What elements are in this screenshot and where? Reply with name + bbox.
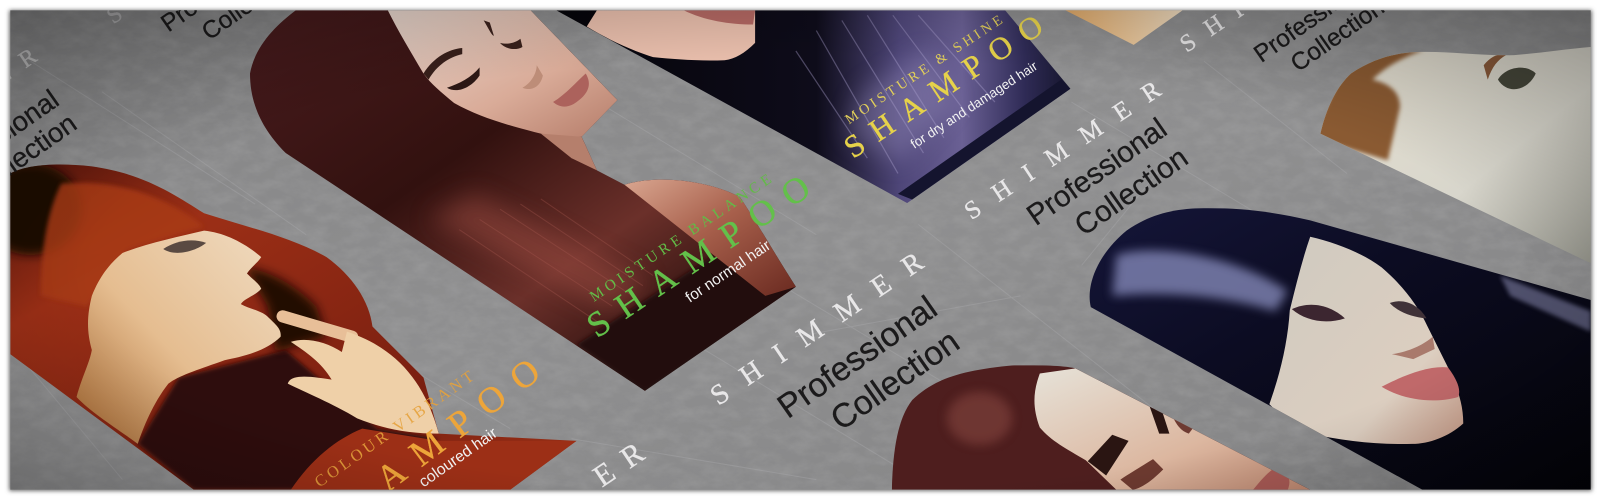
hair gloss [1112, 250, 1288, 311]
face [1034, 368, 1310, 490]
panel: brown hair label bottom [888, 362, 1316, 495]
label: COLOUR VIBRANT SHAMPOO: COLOUR VIBRANT [311, 365, 480, 491]
text: SHIMMER Professional Collection, centre: Professional [771, 289, 944, 426]
brown hair [888, 362, 1316, 495]
nose [522, 65, 543, 89]
hair sheen [847, 51, 954, 163]
eye [447, 67, 480, 90]
lips [1382, 367, 1459, 400]
text: Professional Collection, top left: S [102, 1, 127, 29]
label: MOISTURE & SHINE SHAMPOO: SHAMPOO [838, 1, 1060, 165]
brown hair [1311, 50, 1423, 160]
dark edge near tip [898, 80, 1070, 204]
fringe highlight [41, 183, 204, 306]
dark hair core behind face [245, 267, 327, 352]
navy hair [1082, 204, 1592, 495]
label: MOISTURE & SHINE SHAMPOO: for dry and damaged hair [908, 58, 1041, 151]
upper eye [1169, 403, 1202, 434]
neck [541, 134, 597, 170]
hair strands [796, 15, 995, 173]
face [1269, 237, 1463, 444]
lower red hair [291, 429, 577, 490]
hair strands [459, 199, 653, 321]
panel: purple hair label [556, 10, 1077, 209]
hair sheen [947, 392, 1012, 445]
face fragment [587, 10, 755, 60]
palm [288, 332, 439, 434]
right eye [1390, 301, 1427, 318]
skin [1316, 41, 1592, 265]
panel: red hair label [0, 158, 582, 495]
panel: navy hair label [1082, 204, 1592, 495]
panel: top peach fragment [1065, 10, 1183, 45]
upper brow [1145, 393, 1169, 434]
dark back-of-neck hair [138, 350, 439, 490]
eye [1498, 68, 1536, 89]
hand [283, 316, 439, 434]
label: MOISTURE BALANCE SHAMPOO: for normal hair [683, 237, 774, 306]
text: SHIMMER Professional Collection, centre: Collection [824, 323, 966, 438]
upper brow [484, 20, 494, 36]
nose [1392, 337, 1435, 359]
panel: brown hair label [245, 10, 801, 398]
lips [553, 73, 589, 107]
lips [684, 10, 755, 24]
text: SHIMMER Professional Collection, upper: Professional [1021, 112, 1173, 232]
text: Professional Collection, top right [1175, 0, 1389, 77]
brow [1088, 435, 1129, 476]
label: COLOUR VIBRANT SHAMPOO: coloured hair [416, 425, 501, 491]
label: MOISTURE & SHINE SHAMPOO: MOISTURE & SHINE [842, 10, 1009, 128]
scratch texture [20, 61, 1347, 480]
label: MOISTURE BALANCE SHAMPOO: SHAMPOO [579, 159, 829, 345]
upper eye [500, 39, 522, 49]
brow [1484, 54, 1506, 80]
text: SHIMMER Professional Collection, upper: SHIMMER [959, 65, 1181, 225]
lips [1253, 467, 1289, 490]
left eye [1292, 305, 1345, 321]
text: Professional Collection, top left [0, 0, 301, 202]
label: MOISTURE BALANCE SHAMPOO: MOISTURE BALANCE [587, 168, 778, 305]
finger [283, 316, 352, 337]
dark crown shadow [0, 163, 82, 255]
dark lower hair [577, 255, 796, 391]
hair sheen [429, 194, 648, 311]
eye lower [1120, 459, 1163, 490]
face [388, 10, 617, 137]
face and neck [77, 231, 281, 444]
shoulder [624, 180, 796, 296]
purple hair [556, 10, 1077, 209]
red hair [10, 158, 582, 495]
panel: top right label [1311, 41, 1592, 265]
eye [163, 240, 206, 253]
brow [423, 48, 462, 80]
brown hair [245, 10, 801, 398]
right hair highlight [1500, 276, 1591, 332]
text: SHIMMER, bottom: ER [587, 428, 662, 494]
text: SHIMMER Professional Collection, centre: SHIMMER [705, 236, 945, 412]
text: SHIMMER Professional Collection, upper: Collection [1069, 141, 1194, 242]
